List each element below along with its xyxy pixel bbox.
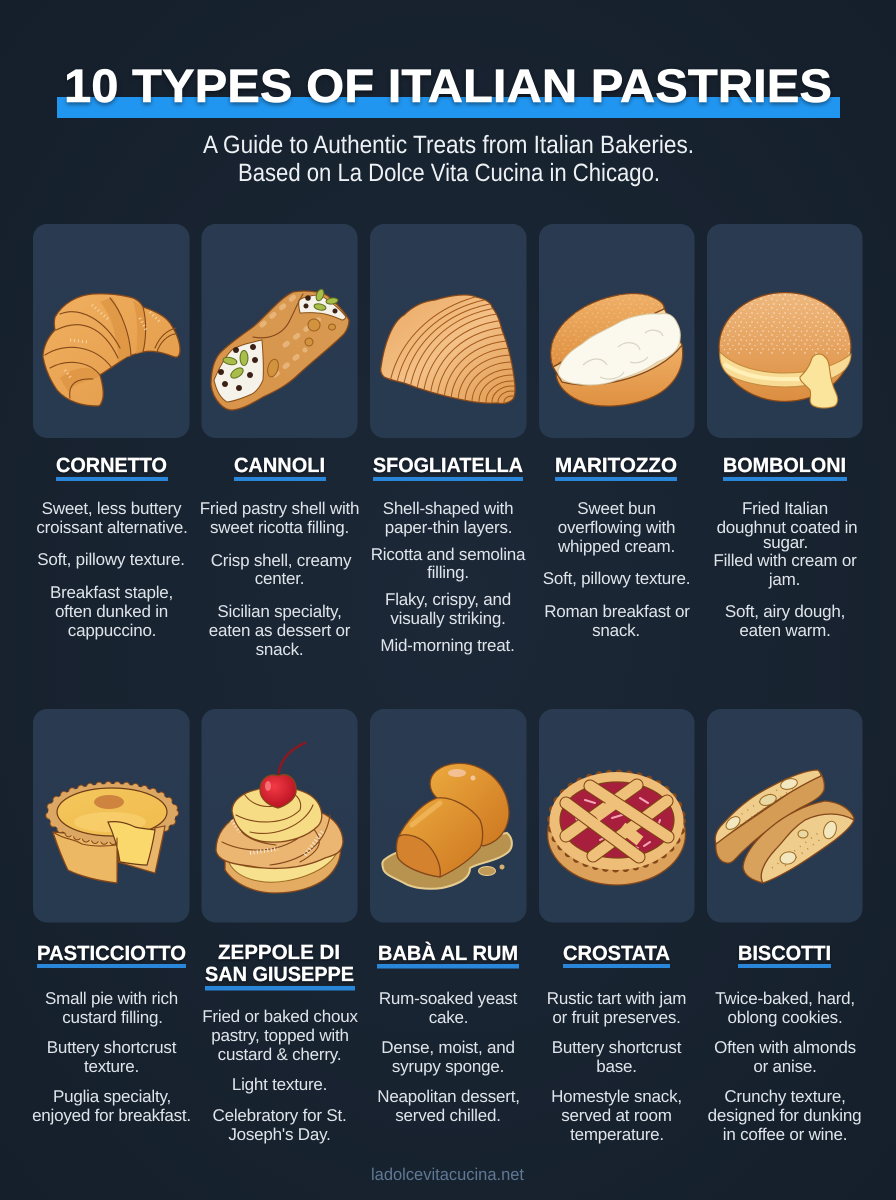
lattice strips [566,785,668,857]
description: eaten as dessert or [209,621,351,640]
panel: biscotti [707,709,862,1144]
description: Sweet, less buttery [42,499,182,518]
description [543,499,690,640]
description: or fruit preserves. [552,1008,681,1027]
description: sweet ricotta filling. [210,518,349,537]
description: Sweet bun [577,499,656,518]
description: Breakfast staple, [50,583,173,602]
title block [57,59,840,118]
description: Shell-shaped with [383,499,513,518]
description [200,499,359,659]
description: oblong cookies. [728,1008,842,1027]
panel: crostata [539,709,694,1144]
description: in coffee or wine. [723,1125,847,1144]
description: or anise. [753,1057,817,1076]
icon: biscotti [715,770,854,883]
heading: CROSTATA [563,942,670,965]
description [708,989,861,1144]
icon: sfogliatella [380,294,516,404]
description: cake. [429,1008,468,1027]
description: Roman breakfast or [544,602,690,621]
panel: zeppole di san giuseppe [202,709,358,1144]
description: Dense, moist, and [381,1038,515,1057]
heading: MARITOZZO [555,454,677,477]
heading: BOMBOLONI [723,454,846,477]
footer url: ladolcevitacucina.net [371,1165,524,1184]
description: jam. [768,570,800,589]
description: served chilled. [395,1106,501,1125]
description: Fried Italian [742,499,828,518]
heading: ZEPPOLE DI [218,941,340,964]
description [547,989,686,1144]
panel: maritozzo [539,224,694,640]
description: Fried pastry shell with [200,499,359,518]
description: Soft, pillowy texture. [543,569,690,588]
description: Celebratory for St. [213,1106,346,1125]
description: Rum-soaked yeast [379,989,518,1008]
description: sugar. [763,533,808,552]
description: enjoyed for breakfast. [32,1106,191,1125]
description: Fried or baked choux [202,1007,358,1026]
subtitle: Based on La Dolce Vita Cucina in Chicago. [238,159,660,187]
description: Crunchy texture, [724,1087,846,1106]
description: Often with almonds [714,1038,856,1057]
description: Light texture. [232,1075,327,1094]
description: designed for dunking [708,1106,861,1125]
description: Sicilian specialty, [217,602,342,621]
heading: SFOGLIATELLA [373,454,523,477]
description [371,499,526,655]
description: filling. [427,563,469,582]
description: paper-thin layers. [385,518,512,537]
icon: bomboloni [719,292,851,408]
description: Neapolitan dessert, [377,1087,520,1106]
description: Ricotta and semolina [371,545,526,564]
description: often dunked in [55,602,168,621]
description: doughnut coated in [717,518,857,537]
panel: pasticciotto [32,709,191,1125]
description: croissant alternative. [36,518,188,537]
heading [205,941,355,990]
panel: cornetto [33,224,190,640]
panel: baba al rum [370,709,526,1125]
description: Twice-baked, hard, [715,989,855,1008]
icon: baba [382,763,512,889]
description: whipped cream. [557,537,675,556]
icon: crostata [548,772,686,885]
description [32,989,191,1125]
panel: bomboloni [707,224,862,640]
description: cappuccino. [68,621,156,640]
subtitle: A Guide to Authentic Treats from Italian Bakeries. [203,131,694,159]
title: 10 TYPES OF ITALIAN PASTRIES [64,59,832,112]
description [377,989,520,1125]
description: visually striking. [390,609,506,628]
icon: cannoli [211,288,349,410]
description [713,499,857,640]
description: base. [596,1057,637,1076]
heading: SAN GIUSEPPE [205,963,354,986]
description: Soft, pillowy texture. [37,550,185,569]
description: Buttery shortcrust [552,1038,682,1057]
description: Filled with cream or [713,551,857,570]
icon: zeppole [216,743,343,893]
description: temperature. [570,1125,664,1144]
description: Homestyle snack, [551,1087,682,1106]
icon: pasticciotto [48,784,176,883]
description: texture. [84,1057,139,1076]
description: eaten warm. [739,621,831,640]
icon: maritozzo [550,290,683,406]
description: custard filling. [62,1008,163,1027]
description: center. [255,569,304,588]
heading: CANNOLI [234,454,325,477]
description [36,499,188,640]
description: Buttery shortcrust [47,1038,177,1057]
description: Puglia specialty, [53,1087,171,1106]
description: Small pie with rich [45,989,178,1008]
description: overflowing with [558,518,675,537]
description: Mid-morning treat. [380,636,515,655]
description: syrupy sponge. [392,1057,504,1076]
panel: sfogliatella [370,224,526,654]
heading: CORNETTO [56,454,167,477]
description: pastry, topped with [211,1026,349,1045]
description: custard & cherry. [218,1045,341,1064]
description: snack. [256,640,303,659]
description: snack. [592,621,640,640]
heading: BABÀ AL RUM [378,941,518,965]
heading: PASTICCIOTTO [37,942,186,965]
description: Crisp shell, creamy [211,551,352,570]
description: Joseph's Day. [228,1125,331,1144]
description: Flaky, crispy, and [385,590,511,609]
description [202,1007,358,1144]
panel: cannoli [200,224,359,659]
subtitle [203,131,694,187]
description: Rustic tart with jam [547,989,686,1008]
title underline bar [57,97,840,118]
description: served at room [561,1106,672,1125]
description: Soft, airy dough, [725,602,845,621]
icon: cornetto [43,294,180,406]
heading: BISCOTTI [738,942,831,965]
